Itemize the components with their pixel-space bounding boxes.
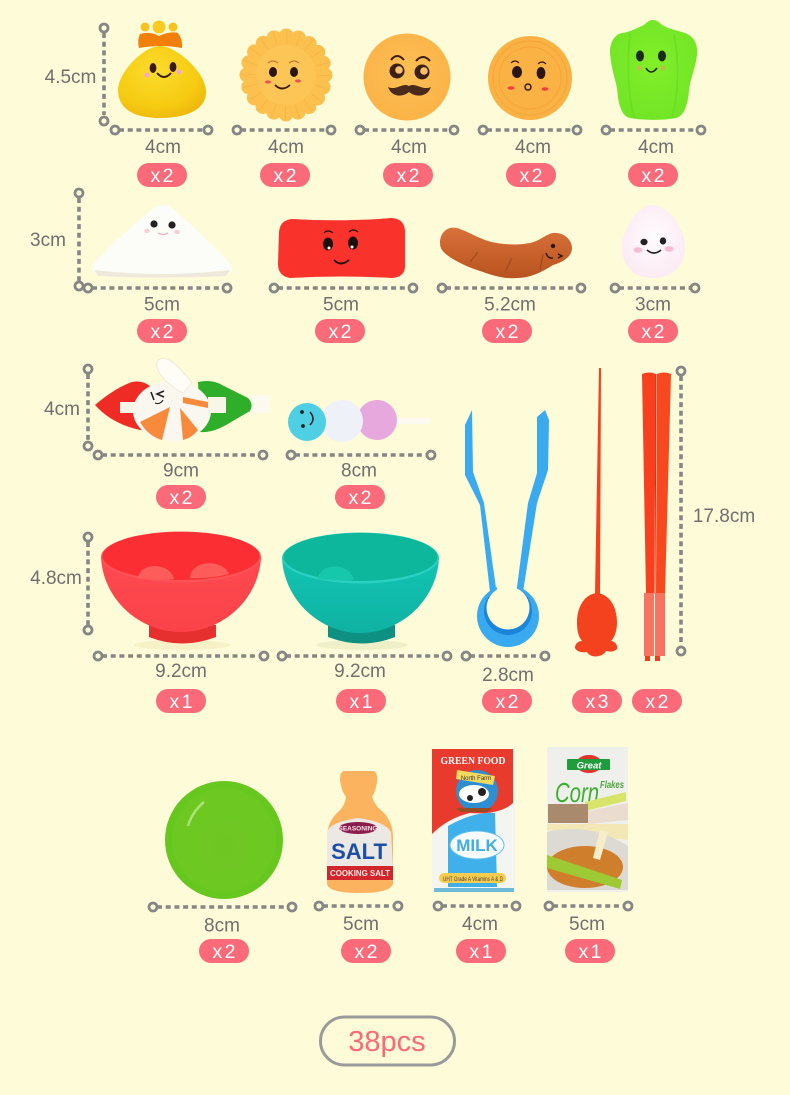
badge x2: x 2	[495, 321, 519, 343]
dimension: sun cookie width: 4cm	[268, 137, 304, 158]
item: surprised cookie	[488, 36, 572, 120]
dimension: mustache cookie width	[356, 126, 458, 158]
badge x2	[482, 319, 532, 343]
row 3 dimensions	[44, 365, 435, 482]
badge x2	[315, 319, 365, 343]
badge x2: x 2	[354, 941, 378, 963]
dimension: tongs width	[462, 652, 549, 686]
dimension: teal bowl width	[278, 652, 451, 682]
badge x1: x 1	[349, 691, 373, 713]
row 5: plate and packaging	[165, 747, 628, 899]
item: red tofu bar	[278, 218, 405, 278]
item: corn flakes box: Corn	[555, 777, 599, 808]
item: teal bowl	[282, 532, 439, 650]
item: sun cookie	[247, 36, 325, 114]
dimension: dumpling width: 4cm	[145, 137, 181, 158]
dimension: height 4.8cm: 4.8cm	[30, 568, 82, 589]
dimension: height 4cm	[44, 365, 92, 450]
dimension: chopsticks length: 17.8cm	[693, 506, 755, 527]
badge x2	[628, 319, 678, 343]
badge x2: x 2	[150, 165, 174, 187]
dimension: corn flakes width: 5cm	[569, 914, 605, 935]
item: corn flakes box	[547, 747, 628, 892]
badge x1: x 1	[578, 941, 602, 963]
badge x2	[482, 689, 532, 713]
row 1 quantity badges	[137, 163, 678, 187]
item: salt bottle: SALT	[331, 839, 387, 864]
dimension: sun cookie width	[233, 126, 335, 158]
dimension: dumpling width	[111, 126, 212, 158]
dimension: plate width: 8cm	[204, 916, 240, 936]
badge x1	[336, 689, 386, 713]
dimension: height 4cm: 4cm	[44, 399, 80, 420]
row 5 quantity badges	[199, 939, 615, 963]
item: green pepper	[610, 20, 697, 120]
dimension: surprised cookie width	[479, 126, 581, 158]
total pieces pill: 38pcs	[348, 1026, 426, 1058]
row 2 dimensions	[30, 189, 699, 316]
item: milk carton: North Farm	[461, 776, 491, 782]
row 2 quantity badges	[137, 319, 678, 343]
dimension: milk width: 4cm	[462, 914, 498, 935]
badge x1	[156, 689, 206, 713]
item: milk carton: UHT Grade A Vitamins A & D	[443, 877, 504, 883]
dimension: bar width	[270, 284, 417, 316]
badge x2: x 2	[495, 691, 519, 713]
dimension: pepper width	[602, 126, 705, 158]
item: salt bottle: COOKING SALT	[330, 868, 391, 878]
item: red chopsticks	[642, 372, 671, 661]
row 2: triangle, red bar, sausage, egg	[92, 205, 685, 278]
dimension: skewer width: 9cm	[163, 460, 199, 482]
badge x2	[199, 939, 249, 963]
item: blue tongs	[465, 410, 549, 647]
dimension: height 3cm	[30, 189, 83, 290]
dimension: mustache cookie width: 4cm	[391, 137, 427, 158]
item: mustache cookie	[364, 34, 450, 120]
dimension: sausage width	[438, 284, 585, 316]
row 3 quantity badges	[156, 485, 385, 509]
badge x2	[632, 689, 682, 713]
badge x1: x 1	[469, 941, 493, 963]
dimension: bottle width: 5cm	[343, 914, 379, 935]
dimension: pepper width: 4cm	[638, 137, 674, 158]
item: sausage	[440, 228, 572, 278]
row 4 dimensions	[30, 367, 755, 686]
item: corn flakes box: Flakes	[600, 780, 624, 791]
badge x2: x 2	[641, 165, 665, 187]
dimension: dango width: 8cm	[341, 460, 377, 482]
row 1 dimensions	[45, 24, 705, 158]
item: salt bottle	[327, 771, 393, 893]
dimension: skewer width	[94, 451, 267, 482]
item: three-colour dango	[288, 400, 431, 442]
dimension: egg width	[611, 284, 699, 316]
dimension: height 4.5cm	[45, 24, 108, 125]
dimension: height 4.5cm: 4.5cm	[45, 67, 96, 88]
dimension: height 4.8cm	[30, 533, 92, 634]
badge x1	[565, 939, 615, 963]
badge x2	[628, 163, 678, 187]
row 3: skewers	[95, 358, 431, 442]
dimension: red bowl width: 9.2cm	[155, 661, 207, 682]
dimension: tongs width: 2.8cm	[482, 665, 534, 686]
badge x2: x 2	[273, 165, 297, 187]
badge x3: x 3	[585, 691, 609, 713]
badge x2: x 2	[328, 321, 352, 343]
badge x2: x 2	[169, 487, 193, 509]
badge x2: x 2	[150, 321, 174, 343]
badge x2	[383, 163, 433, 187]
item: white egg	[622, 205, 685, 278]
badge x2	[156, 485, 206, 509]
badge x2: x 2	[212, 941, 236, 963]
item: salt bottle: SEASONING	[338, 826, 378, 832]
badge x2	[335, 485, 385, 509]
dimension: triangle width	[84, 284, 231, 316]
item: corn flakes box: Great	[577, 760, 602, 772]
item: red bowl	[101, 532, 261, 650]
dimension: bar width: 5cm	[323, 294, 359, 316]
badge x2	[137, 319, 187, 343]
badge x1: x 1	[169, 691, 193, 713]
badge x2	[506, 163, 556, 187]
badge x2	[260, 163, 310, 187]
item: milk carton: GREEN FOOD	[440, 755, 506, 767]
dimension: triangle width: 5cm	[144, 294, 180, 316]
badge x2	[137, 163, 187, 187]
dimension: teal bowl width: 9.2cm	[334, 661, 386, 682]
badge x3	[572, 689, 622, 713]
dimension: red bowl width	[94, 652, 268, 682]
item: milk carton	[432, 749, 515, 892]
badge x1	[456, 939, 506, 963]
item: red fish spoon	[575, 368, 617, 656]
dimension: plate width	[149, 903, 296, 936]
dimension: dango width	[287, 451, 435, 482]
row 4 quantity badges	[156, 689, 682, 713]
badge x2: x 2	[641, 321, 665, 343]
dimension: egg width: 3cm	[635, 294, 671, 316]
dimension: height 3cm: 3cm	[30, 230, 66, 251]
dimension: corn flakes width	[545, 902, 632, 935]
row 5 dimensions	[149, 902, 632, 936]
item: white rice triangle	[92, 205, 232, 278]
dimension: sausage width: 5.2cm	[484, 294, 536, 316]
badge x2: x 2	[519, 165, 543, 187]
badge x2: x 2	[348, 487, 372, 509]
dimension: bottle width	[315, 902, 402, 935]
badge x2	[341, 939, 391, 963]
item: milk carton: MILK	[456, 836, 498, 855]
item: green plate	[165, 781, 283, 899]
dimension: chopsticks length	[677, 367, 755, 655]
total pieces pill	[320, 1017, 454, 1065]
badge x2: x 2	[645, 691, 669, 713]
item: seafood skewer	[95, 358, 270, 441]
row 1: dumplings and cookies	[118, 20, 697, 120]
row 4: bowls and utensils	[101, 368, 671, 661]
badge x2: x 2	[396, 165, 420, 187]
dimension: milk width	[434, 902, 520, 935]
item: yellow dumpling with bow	[118, 20, 206, 118]
dimension: surprised cookie width: 4cm	[515, 137, 551, 158]
